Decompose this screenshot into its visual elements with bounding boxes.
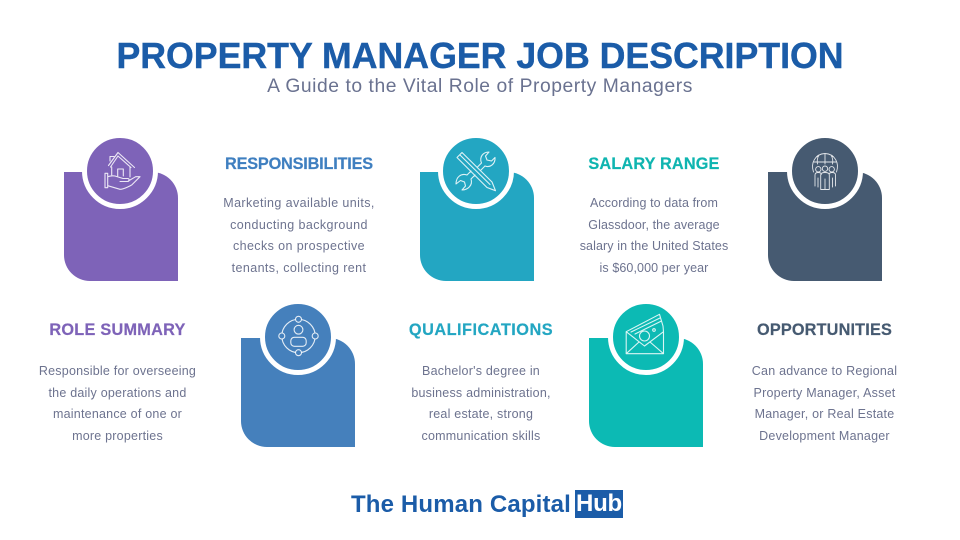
text: opportunities: Can advance to Regional <box>752 364 897 378</box>
text: qualifications: real estate, strong <box>429 407 533 421</box>
text: role summary <box>39 364 196 443</box>
text: opportunities: Manager, or Real Estate <box>755 407 894 421</box>
text: salary <box>580 196 728 275</box>
text: qualifications <box>411 364 551 443</box>
text: qualifications: Bachelor's degree in <box>422 364 540 378</box>
card: slate <box>768 172 882 281</box>
icon: house in hand <box>82 132 158 208</box>
text: opportunities: Development Manager <box>759 429 890 443</box>
text: responsibilities: Marketing available units, <box>223 196 375 210</box>
logo: The Human Capital Hub <box>351 490 623 518</box>
text: qualifications: business administration, <box>411 386 551 400</box>
logo badge: Hub: Hub <box>576 490 622 517</box>
heading: role summary: ROLE SUMMARY <box>49 321 186 339</box>
text: qualifications: communication skills <box>421 429 541 443</box>
text: salary: According to data from <box>590 196 718 210</box>
text: salary: salary in the United States <box>580 239 728 253</box>
text: role summary: Responsible for overseeing <box>39 364 196 378</box>
panel: responsibilities text <box>223 155 375 275</box>
panel: opportunities graphic <box>768 138 882 281</box>
text: salary: Glassdoor, the average <box>588 218 720 232</box>
card: teal blue <box>420 172 534 281</box>
text: role summary: more properties <box>72 429 163 443</box>
panel: responsibilities graphic <box>241 304 355 447</box>
text: salary: is $60,000 per year <box>600 261 708 275</box>
panel: qualifications graphic <box>420 138 534 281</box>
panel: qualifications text <box>409 321 553 443</box>
icon: money envelope <box>608 298 684 374</box>
icon: person in orbit <box>260 298 336 374</box>
logo wordmark: The Human Capital <box>351 491 571 518</box>
panel: opportunities text <box>752 321 897 443</box>
heading: opportunities: OPPORTUNITIES <box>757 321 892 339</box>
title: PROPERTY MANAGER JOB DESCRIPTION <box>116 36 844 76</box>
heading: qualifications: QUALIFICATIONS <box>409 321 553 339</box>
text: responsibilities <box>223 196 375 275</box>
text: responsibilities: checks on prospective <box>233 239 365 253</box>
text: role summary: maintenance of one or <box>53 407 182 421</box>
heading: salary range: SALARY RANGE <box>588 155 720 173</box>
card: purple <box>64 172 178 281</box>
panel: role summary text <box>39 321 196 443</box>
text: opportunities <box>752 364 897 443</box>
icon: wrench and pencil <box>438 132 514 208</box>
card: teal <box>589 338 703 447</box>
icon: people and globe <box>786 132 862 208</box>
panel: role summary graphic <box>64 138 178 281</box>
text: role summary: the daily operations and <box>48 386 186 400</box>
card: blue <box>241 338 355 447</box>
panel: salary text <box>580 155 728 275</box>
text: responsibilities: conducting background <box>230 218 368 232</box>
heading: responsibilities: RESPONSIBILITIES <box>225 155 373 173</box>
text: opportunities: Property Manager, Asset <box>754 386 895 400</box>
text: responsibilities: tenants, collecting rent <box>232 261 366 275</box>
subtitle: A Guide to the Vital Role of Property Managers <box>267 76 693 97</box>
panel: salary graphic <box>589 304 703 447</box>
